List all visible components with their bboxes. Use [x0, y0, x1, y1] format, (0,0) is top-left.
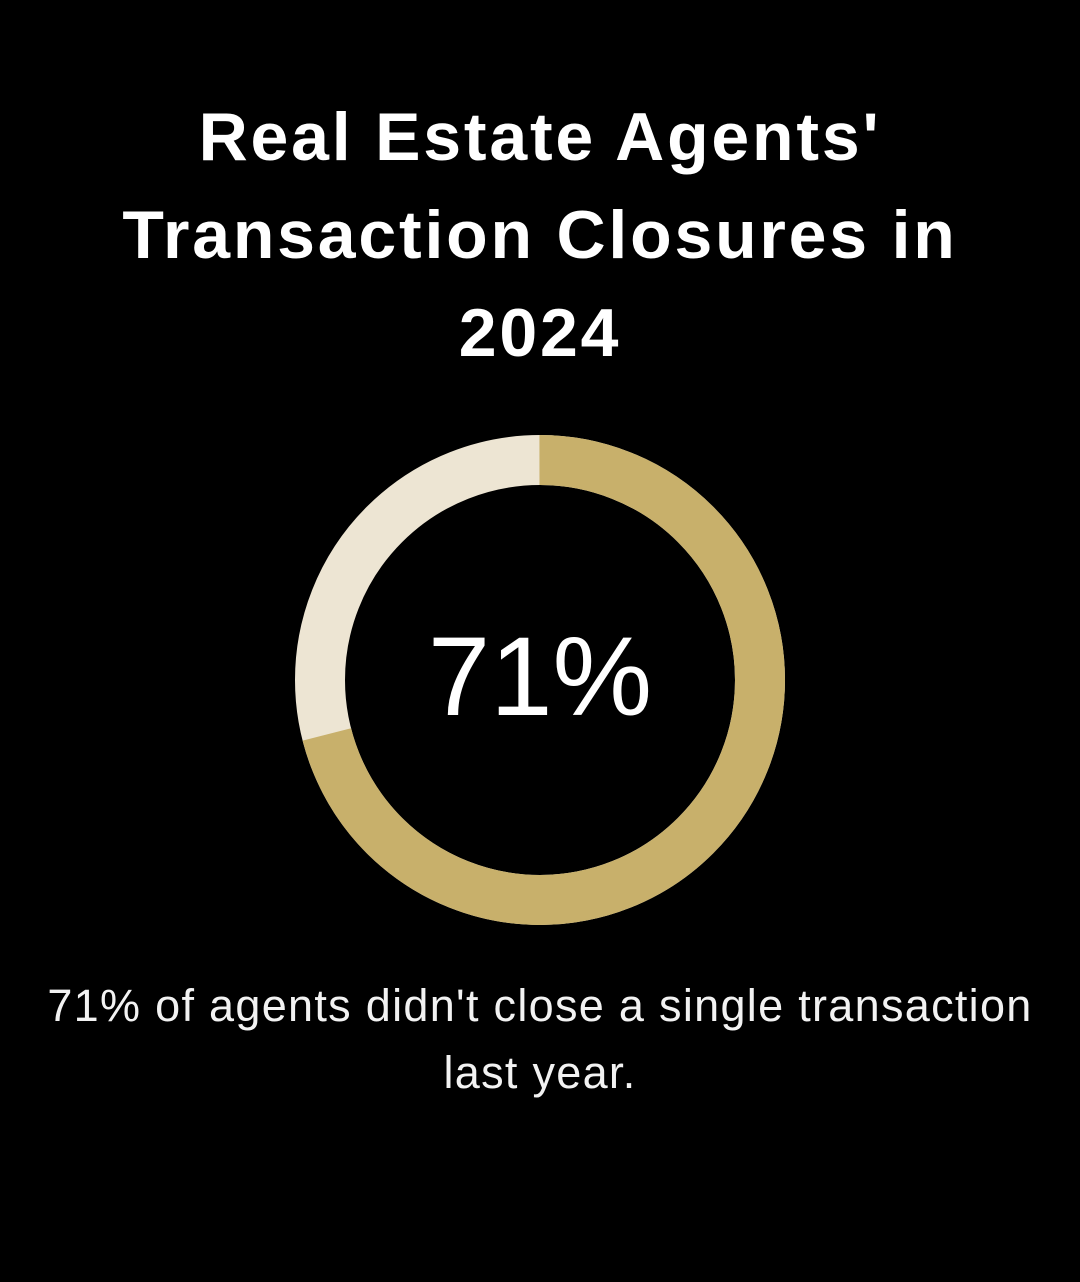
- caption: [47, 980, 1033, 1098]
- title: 2024: [459, 295, 621, 371]
- title: Real Estate Agents': [199, 99, 881, 175]
- donut chart: [295, 435, 785, 925]
- center value: 71%: [428, 614, 652, 739]
- 71% segment: [320, 460, 760, 900]
- remaining segment: [320, 460, 760, 900]
- title: [122, 99, 958, 371]
- caption: last year.: [443, 1047, 637, 1098]
- caption: 71% of agents didn't close a single transaction: [47, 980, 1033, 1031]
- title: Transaction Closures in: [122, 197, 958, 273]
